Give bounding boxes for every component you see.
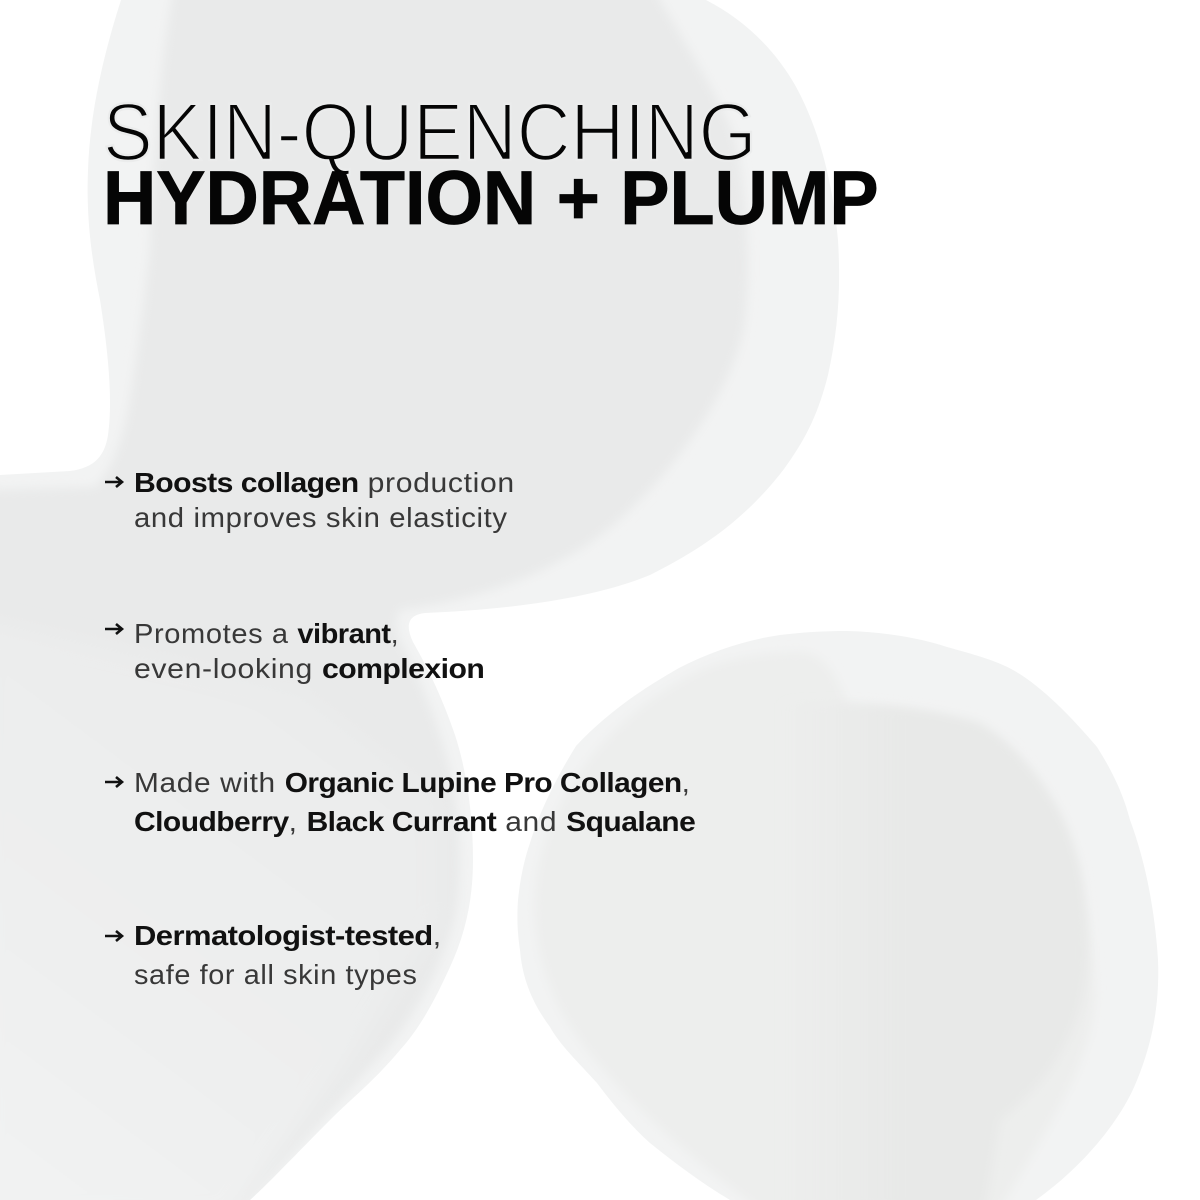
bullet: vibrant complexion: Promotes a vibrant, <box>134 618 399 649</box>
bullet: dermatologist tested: Dermatologist-tested, <box>134 920 442 951</box>
arrow icon <box>105 476 124 488</box>
bullet: ingredients <box>105 767 695 837</box>
bullet: boosts collagen: Boosts collagen production <box>134 467 515 498</box>
arrow icon <box>105 930 124 942</box>
top and left blob <box>0 0 900 1200</box>
arrow icon <box>105 776 124 788</box>
title: SKIN-QUENCHING <box>103 87 757 178</box>
arrow icon <box>105 623 124 635</box>
title: HYDRATION + PLUMP <box>103 156 879 241</box>
bottom right blob <box>518 631 1158 1200</box>
bullet: vibrant complexion: even-looking complexion <box>134 653 484 684</box>
bullet: vibrant complexion <box>105 618 484 684</box>
bullet: boosts collagen <box>105 467 515 533</box>
bullet: ingredients: Cloudberry, Black Currant and Squalane <box>134 806 695 837</box>
bullet: dermatologist tested <box>105 920 442 990</box>
bullet: boosts collagen: and improves skin elasticity <box>134 502 508 533</box>
bullet: ingredients: Made with Organic Lupine Pro Collagen, <box>134 767 691 798</box>
title <box>103 87 879 241</box>
bullet: dermatologist tested: safe for all skin types <box>134 959 418 990</box>
